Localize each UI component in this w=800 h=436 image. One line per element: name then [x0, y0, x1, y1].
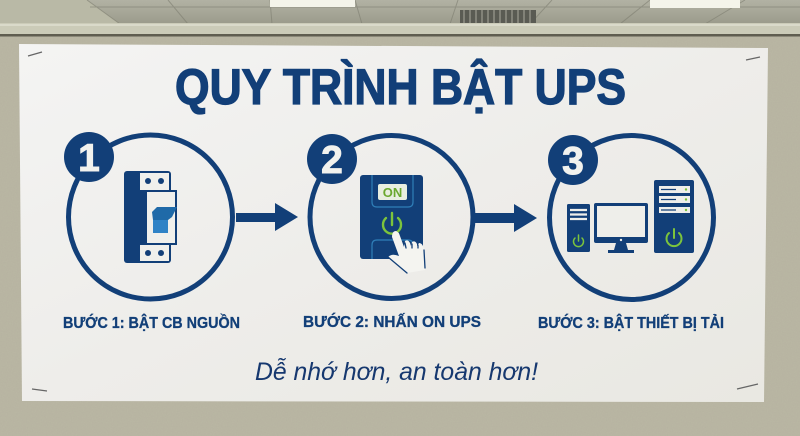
step 3 number badge: 3 [562, 140, 584, 183]
arrow 2 [475, 204, 537, 232]
background: wall rail [0, 23, 800, 34]
title: QUY TRÌNH BẬT UPS [175, 59, 626, 115]
step 2 panel [307, 134, 473, 298]
step 1 number badge: 1 [78, 137, 100, 180]
step 2 number badge [307, 134, 357, 184]
tagline: Dễ nhớ hơn, an toàn hơn! [255, 357, 538, 386]
step 2 label: BƯỚC 2: NHẤN ON UPS [303, 313, 481, 331]
icon: UPS with hand pressing power: ON [383, 185, 402, 200]
step 2 number badge: 2 [321, 139, 343, 182]
step 2 circle [310, 136, 473, 298]
icon: monitor [594, 203, 648, 253]
step 1 panel [64, 132, 232, 299]
icon: UPS with hand pressing power [360, 175, 425, 273]
step 3 panel [548, 135, 714, 300]
step 3 label: BƯỚC 3: BẬT THIẾT BỊ TẢI [538, 314, 724, 332]
step 1 number badge [64, 132, 114, 182]
poster [19, 44, 768, 402]
arrow 1 [236, 203, 298, 231]
step 1 label: BƯỚC 1: BẬT CB NGUỒN [63, 314, 240, 332]
icon: server tower [654, 180, 694, 253]
step 3 circle [550, 136, 714, 300]
step 1 circle [68, 135, 232, 299]
background: office ceiling [0, 0, 800, 24]
icon: circuit breaker [124, 171, 177, 263]
icon: desktop tower [567, 204, 590, 252]
step 3 number badge [548, 135, 598, 185]
